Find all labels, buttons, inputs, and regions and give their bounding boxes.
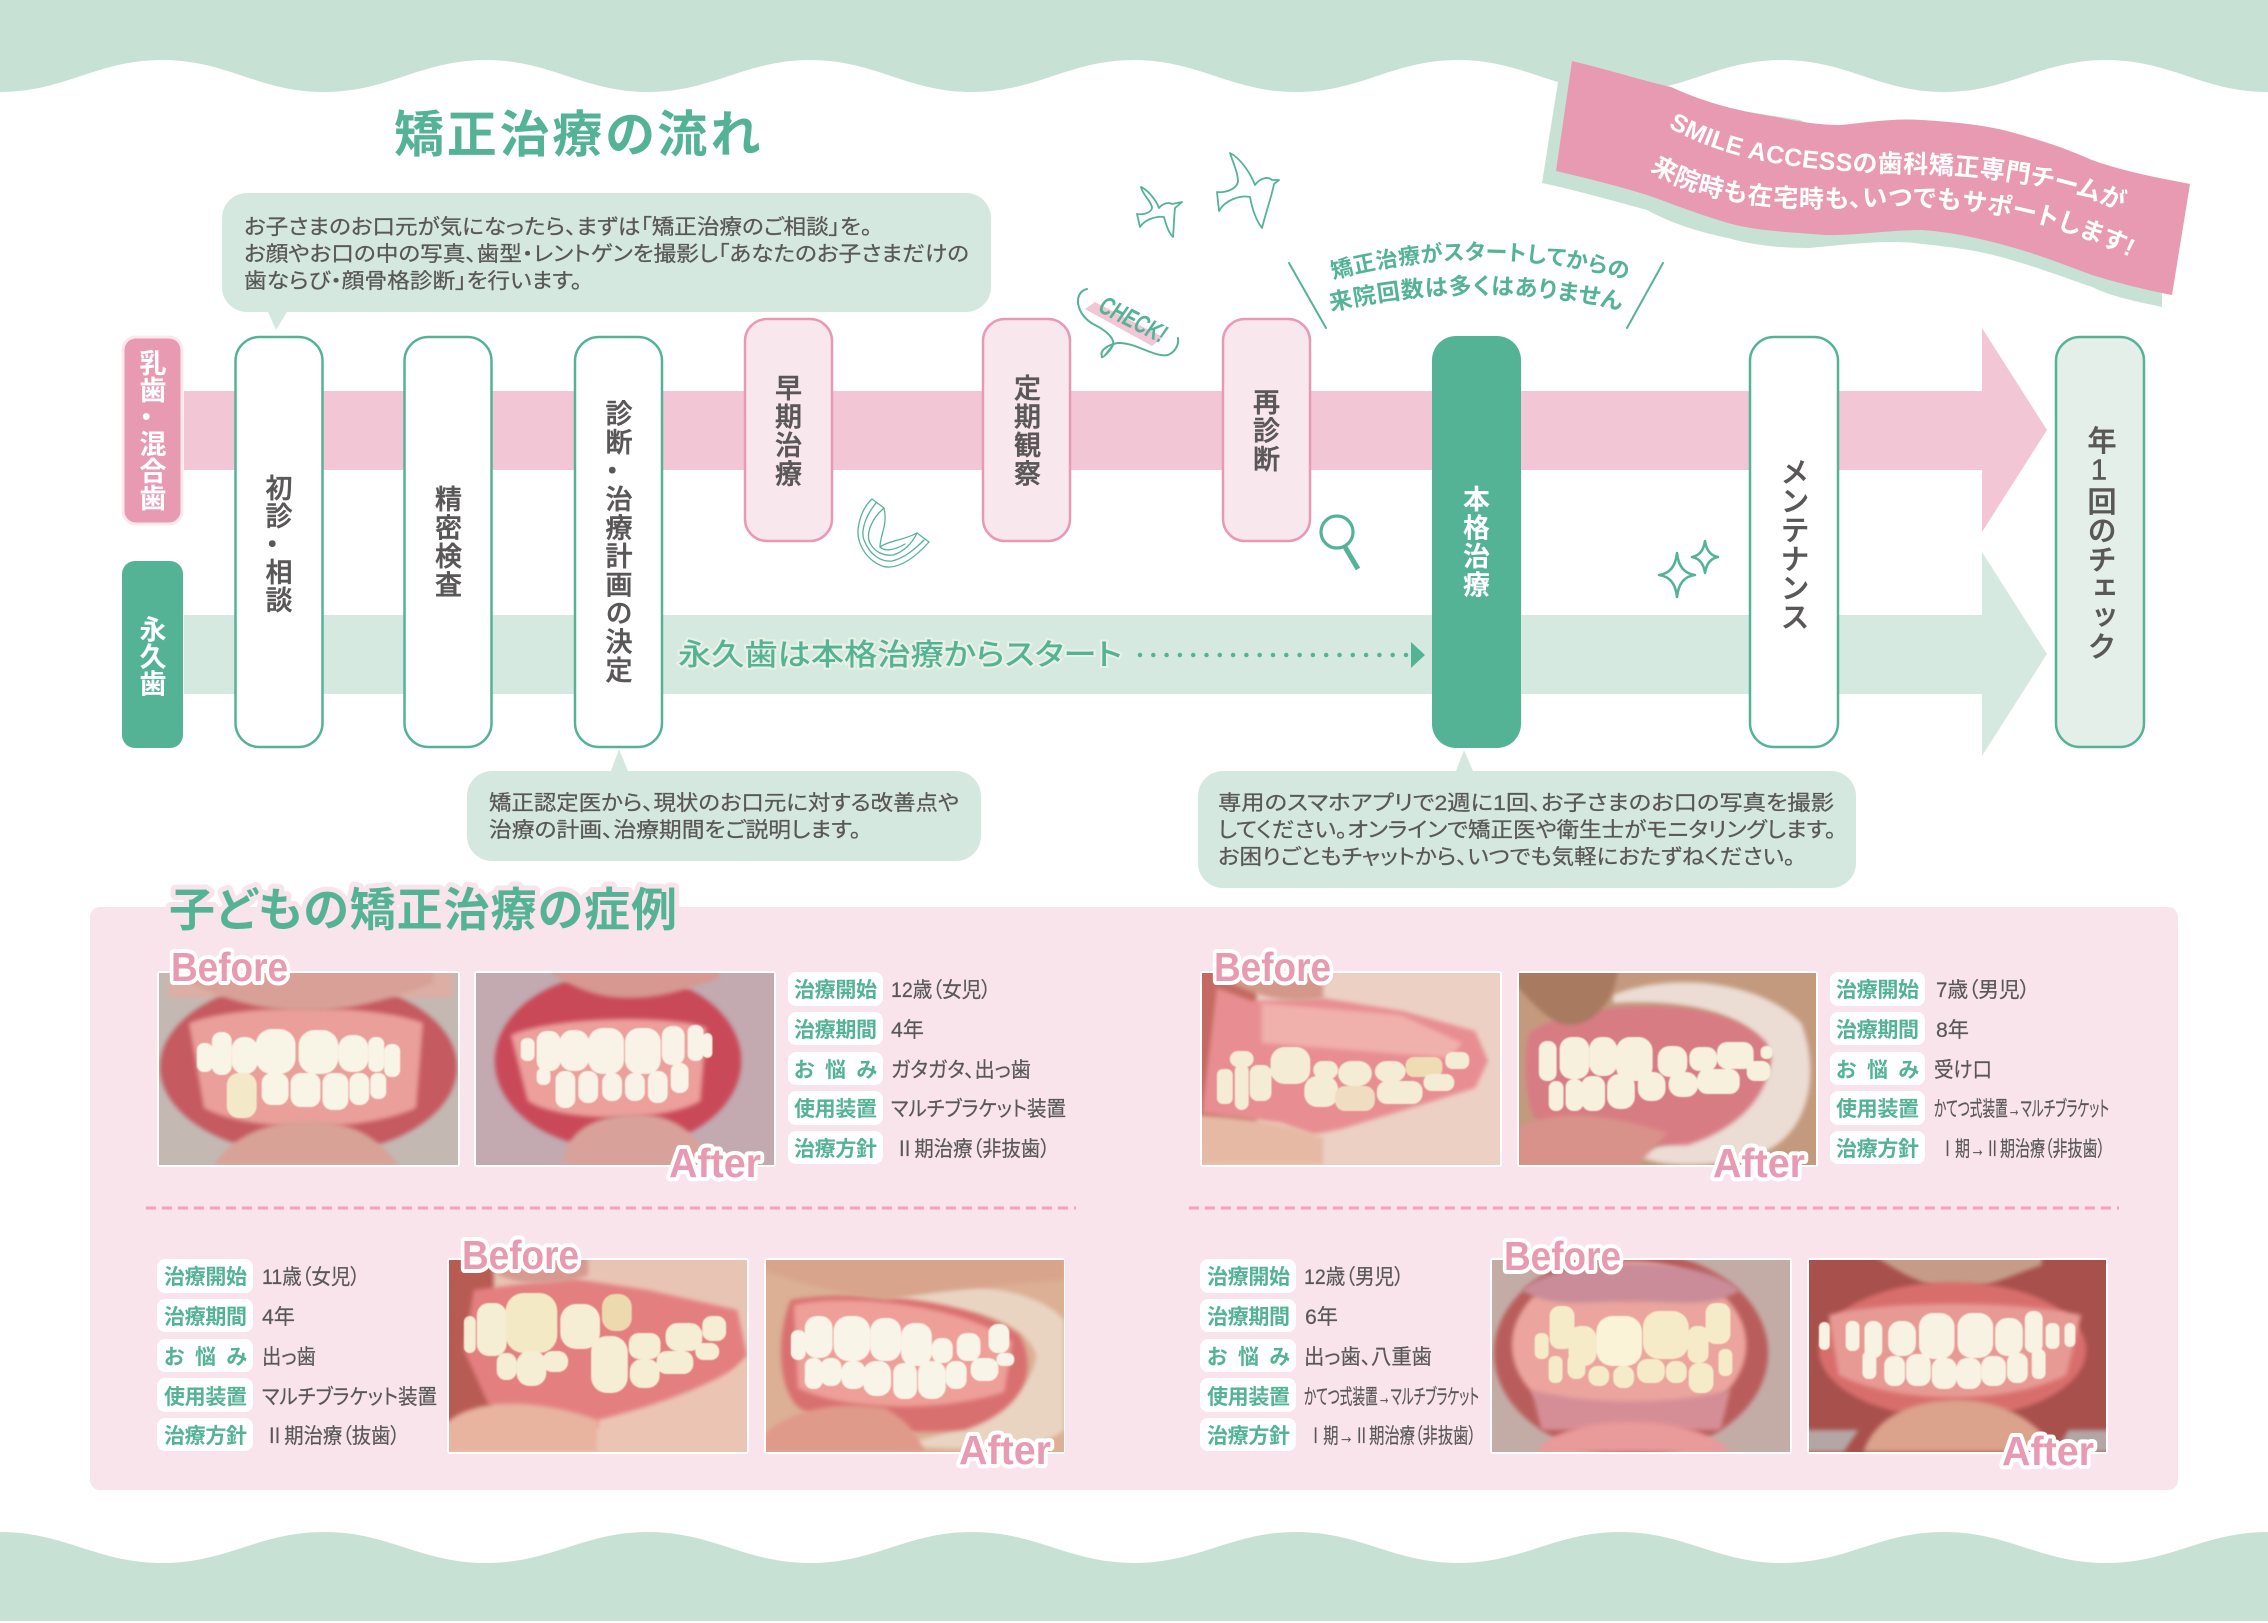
label: permanent teeth: 永久歯 bbox=[136, 615, 166, 696]
Before label: Before bbox=[171, 944, 288, 990]
case data table: 治療開始 bbox=[1207, 1266, 1290, 1289]
label: primary and mixed teeth bbox=[123, 337, 182, 524]
timeline arrow: permanent teeth bbox=[184, 552, 2047, 756]
case data table bbox=[1830, 972, 2109, 1164]
case data table: Ⅰ期→Ⅱ期治療（非抜歯） bbox=[1308, 1425, 1476, 1448]
icon: magnifier bbox=[1321, 516, 1358, 569]
curved note: few visits: 矯正治療がスタートしてからの bbox=[1330, 241, 1628, 280]
case data table: 治療方針 bbox=[1207, 1425, 1290, 1448]
case data table: 治療方針 bbox=[794, 1138, 877, 1161]
heading: case examples: 子どもの矯正治療の症例 bbox=[169, 884, 677, 936]
case data table: かてつ式装置→マルチブラケット bbox=[1934, 1098, 2109, 1121]
case data table: 治療方針 bbox=[1836, 1138, 1919, 1161]
case data table: 12歳（男児） bbox=[1304, 1266, 1404, 1289]
Before label: Before bbox=[462, 1232, 579, 1278]
top wave band bbox=[0, 0, 2268, 92]
case data table: 治療期間 bbox=[1207, 1306, 1290, 1329]
case data table bbox=[1200, 1259, 1479, 1451]
case data table: 治療開始 bbox=[794, 979, 877, 1002]
case data table: 11歳（女児） bbox=[262, 1266, 360, 1289]
case data table: かてつ式装置→マルチブラケット bbox=[1304, 1386, 1479, 1409]
step: first consultation: 初診・相談 bbox=[262, 474, 292, 614]
photo: bottom right before bbox=[1490, 1251, 1792, 1455]
speech bubble: app monitoring bbox=[1198, 750, 1856, 888]
icon: retainer bbox=[858, 499, 929, 567]
step: early treatment bbox=[745, 319, 832, 541]
photo: bottom left after bbox=[761, 1255, 1065, 1454]
step: first consultation bbox=[236, 337, 322, 747]
curved note: few visits bbox=[1288, 241, 1664, 329]
case data table: 治療期間 bbox=[164, 1306, 247, 1329]
step: re-diagnosis: 再診断 bbox=[1249, 388, 1280, 474]
step: diagnosis and plan bbox=[575, 337, 662, 747]
step: detailed examination bbox=[404, 337, 492, 747]
Before label: Before bbox=[1504, 1233, 1621, 1279]
case data table: 12歳（女児） bbox=[891, 979, 991, 1002]
case data table: ガタガタ、出っ歯 bbox=[891, 1059, 1031, 1082]
case data table: お 悩 み bbox=[794, 1059, 877, 1082]
step: diagnosis and plan: 診断・治療計画の決定 bbox=[602, 399, 632, 684]
case data table bbox=[157, 1259, 437, 1451]
step: maintenance bbox=[1750, 337, 1838, 747]
case data table: 6年 bbox=[1305, 1306, 1338, 1329]
case data table bbox=[788, 972, 1066, 1164]
case data table: 出っ歯 bbox=[262, 1346, 316, 1369]
panel: case examples bbox=[90, 907, 2178, 1490]
step: annual check: 年1回のチェック bbox=[2083, 425, 2116, 660]
label: permanent teeth bbox=[122, 561, 183, 748]
arrow note: permanent teeth start at main treatment: 永久歯は本格治療からスタート bbox=[678, 639, 1122, 672]
speech bubble: first consultation: お顔やお口の中の写真、歯型・レントゲンを撮影し「あなたのお子さまだけの bbox=[244, 243, 969, 266]
case: top right bbox=[1197, 944, 2109, 1186]
case data table: Ⅰ期→Ⅱ期治療（非抜歯） bbox=[1940, 1138, 2105, 1161]
case data table: Ⅱ期治療（非抜歯） bbox=[895, 1138, 1050, 1161]
icon: birds bbox=[1137, 153, 1279, 237]
case data table: 8年 bbox=[1936, 1019, 1969, 1042]
case data table: マルチブラケット装置 bbox=[891, 1098, 1066, 1121]
arrow note: permanent teeth start at main treatment bbox=[678, 639, 1425, 672]
icon: sparkles bbox=[1659, 541, 1718, 597]
case: top left bbox=[157, 944, 1066, 1186]
case data table: お 悩 み bbox=[164, 1346, 247, 1369]
step: main treatment: 本格治療 bbox=[1459, 485, 1490, 599]
photo: top right before bbox=[1197, 968, 1502, 1167]
case data table: 治療開始 bbox=[164, 1266, 247, 1289]
title: flow: 矯正治療の流れ bbox=[394, 107, 760, 163]
case data table: 使用装置 bbox=[1836, 1098, 1919, 1121]
speech bubble: plan explanation: 治療の計画、治療期間をご説明します。 bbox=[489, 819, 861, 842]
step: regular observation: 定期観察 bbox=[1010, 374, 1040, 488]
case: bottom left bbox=[157, 1232, 1065, 1473]
case data table: マルチブラケット装置 bbox=[262, 1386, 437, 1409]
timeline arrow: primary and mixed teeth bbox=[184, 328, 2047, 532]
After label: After bbox=[1713, 1140, 1805, 1186]
After label: After bbox=[2002, 1428, 2094, 1474]
speech bubble: first consultation: お子さまのお口元が気になったら、まずは「矯正治療のご相談」を。 bbox=[244, 216, 872, 239]
speech bubble: app monitoring: お困りごともチャットから、いつでも気軽におたずねください。 bbox=[1218, 846, 1795, 869]
step: regular observation bbox=[983, 319, 1070, 541]
step: detailed examination: 精密検査 bbox=[431, 485, 462, 599]
case data table: 治療方針 bbox=[164, 1425, 247, 1448]
photo: top right after bbox=[1514, 968, 1818, 1167]
step: early treatment: 早期治療 bbox=[771, 374, 802, 488]
case data table: 治療期間 bbox=[794, 1019, 877, 1042]
speech bubble: app monitoring: 専用のスマホアプリで2週に1回、お子さまのお口の写真を撮影 bbox=[1218, 792, 1834, 815]
speech bubble: plan explanation: 矯正認定医から、現状のお口元に対する改善点や bbox=[489, 792, 959, 815]
icon: check note bbox=[1078, 289, 1178, 357]
curved note: few visits: 来院回数は多くはありません bbox=[1330, 274, 1622, 312]
case data table: 治療期間 bbox=[1836, 1019, 1919, 1042]
case data table: 4年 bbox=[262, 1306, 295, 1329]
label: primary and mixed teeth: 乳歯・混合歯 bbox=[136, 349, 166, 511]
banner text: SMILE ACCESSの歯科矯正専門チームが bbox=[1670, 114, 2128, 208]
photo: top left after bbox=[474, 968, 776, 1167]
step: maintenance: メンテナンス bbox=[1776, 457, 1808, 631]
After label: After bbox=[959, 1427, 1051, 1473]
speech bubble: first consultation bbox=[222, 193, 991, 330]
case data table: お 悩 み bbox=[1836, 1059, 1919, 1082]
step: re-diagnosis bbox=[1223, 319, 1310, 541]
After label: After bbox=[669, 1140, 761, 1186]
case data table: 7歳（男児） bbox=[1936, 979, 2030, 1002]
photo: bottom left before bbox=[444, 1255, 749, 1454]
step: main treatment bbox=[1432, 336, 1521, 748]
icon: check note: CHECK! bbox=[1094, 290, 1172, 349]
banner ribbon: 来院時も在宅時も、いつでもサポートします! bbox=[1650, 156, 2135, 256]
case data table: 使用装置 bbox=[1207, 1386, 1290, 1409]
case data table: お 悩 み bbox=[1207, 1346, 1290, 1369]
speech bubble: app monitoring: してください。オンラインで矯正医や衛生士がモニタリングします。 bbox=[1218, 819, 1836, 842]
case data table: 使用装置 bbox=[164, 1386, 247, 1409]
divider right bbox=[1189, 1206, 2119, 1210]
photo: top left before bbox=[157, 968, 460, 1167]
case data table: 出っ歯、八重歯 bbox=[1304, 1346, 1432, 1369]
bottom wave band bbox=[0, 1532, 2268, 1621]
case data table: 受け口 bbox=[1934, 1059, 1992, 1082]
divider left bbox=[146, 1206, 1076, 1210]
banner ribbon bbox=[1542, 61, 2190, 307]
Before label: Before bbox=[1214, 944, 1331, 990]
case data table: Ⅱ期治療（抜歯） bbox=[265, 1425, 400, 1448]
case data table: 治療開始 bbox=[1836, 979, 1919, 1002]
case data table: 使用装置 bbox=[794, 1098, 877, 1121]
case data table: 4年 bbox=[891, 1019, 924, 1042]
photo: bottom right after bbox=[1804, 1255, 2111, 1454]
case: bottom right bbox=[1200, 1233, 2111, 1474]
step: annual check bbox=[2056, 337, 2144, 747]
speech bubble: plan explanation bbox=[467, 749, 981, 861]
speech bubble: first consultation: 歯ならび・顔骨格診断」を行います。 bbox=[244, 270, 582, 293]
